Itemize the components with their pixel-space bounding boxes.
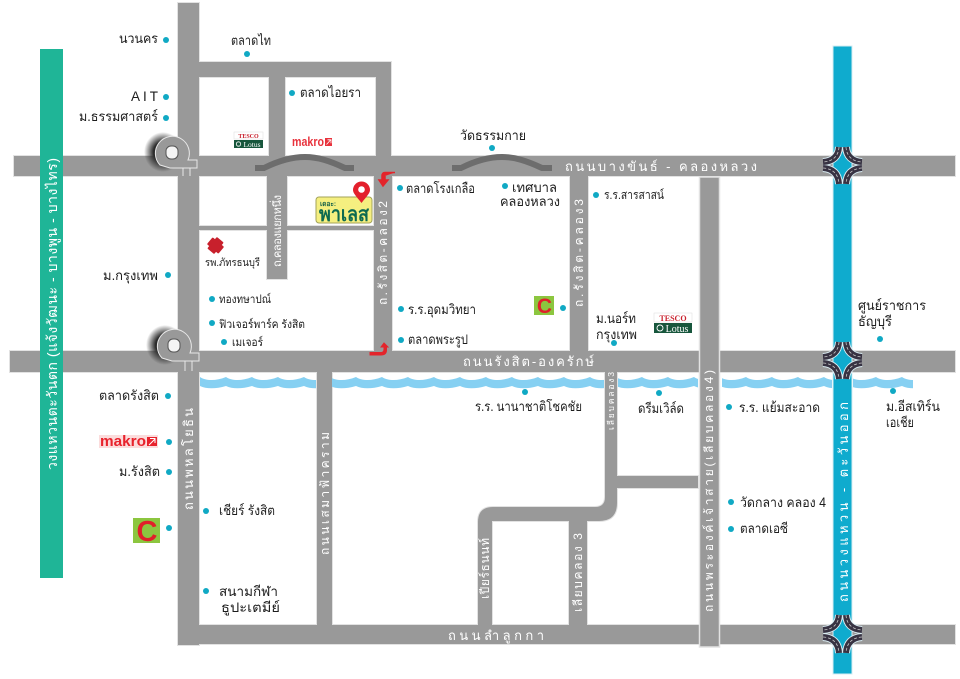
place: Dream World (638, 390, 684, 416)
interchange: Phahonyothin south (146, 325, 199, 371)
place: Thong Thaksa: ทองทษาปณ์ (219, 292, 271, 306)
label: Sema Fah Khram road: ถนนเสมาฟ้าคราม (318, 432, 332, 555)
road: Rangsit Khlong 3 (570, 176, 588, 351)
place: Thanyaburi government center (858, 297, 926, 342)
place: Thong Thaksa (209, 292, 271, 306)
place: Talad Phra Rup (398, 332, 468, 348)
place: Khlong Luang municipality: คลองหลวง (500, 194, 560, 209)
label: Rangsit Ongkharak road: ถนนรังสิต-องครักษ์ (463, 354, 594, 369)
project sign: The Palace (316, 182, 372, 226)
place: North Bangkok University: กรุงเทพ (596, 327, 637, 343)
icon: hospital cross (205, 235, 226, 256)
place: Dream World: ดรีมเวิล์ด (638, 400, 684, 416)
logo: Tesco Lotus north: TESCO (238, 134, 259, 140)
logo: Tesco Lotus north (234, 132, 263, 149)
band: western ring road (40, 49, 63, 578)
road: Lieb Khlong 3 lower (569, 521, 587, 625)
road: Phahonyothin (178, 3, 199, 645)
place: Udom Witthaya school: ร.ร.อุดมวิทยา (408, 302, 476, 318)
interchange: Phahonyothin north (144, 132, 197, 176)
logo: Tesco Lotus east: TESCO (659, 314, 687, 323)
logo: Big C east: C (537, 295, 552, 318)
place: Major (221, 335, 263, 349)
place: Talad Phra Rup: ตลาดพระรูป (408, 332, 468, 348)
place: Cheer Rangsit: เชียร์ รังสิต (219, 502, 275, 518)
place: AIT: AIT (131, 89, 158, 104)
road: Lam Luk Ka (178, 625, 955, 644)
place: Eastern Asia University (886, 388, 940, 430)
place: Thupatemi stadium (203, 584, 280, 616)
label: Rangsit Khlong 2 road: ถ.รังสิต-คลอง2 (376, 201, 390, 305)
logo: Tesco Lotus north: Lotus (243, 140, 261, 149)
place: Talad Aiyara: ตลาดไอยรา (300, 85, 361, 100)
road: Lieb Khlong 3 upper with curve (478, 372, 617, 625)
road: top side road (199, 62, 391, 77)
place: Major: เมเจอร์ (232, 335, 263, 349)
place: Thammasat University: ม.ธรรมศาสตร์ (79, 108, 158, 124)
place: North Bangkok University: ม.นอร์ท (596, 310, 636, 326)
arrow: turn into Khlong 2 road from north (379, 172, 395, 186)
road: Khlong Yaek Nueng (267, 176, 287, 279)
label: Khlong Yaek Nueng road: ถ.คลองแยกหนึ่ง (269, 195, 284, 267)
place: Yaem Sa-at school: ร.ร. แย้มสะอาด (739, 400, 820, 415)
place: Khlong Luang municipality (500, 180, 560, 209)
label: Lam Luk Ka road: ถนนลำลูกกา (448, 628, 544, 644)
place: Khlong Luang municipality: เทศบาล (512, 180, 557, 195)
project sign: The Palace: เดอะ: (320, 201, 336, 208)
label: Piyarom road: เปียร์ธนนท์ (478, 538, 492, 599)
road: branch to Khlong 4 (617, 476, 698, 488)
logo: Tesco Lotus east (654, 313, 692, 335)
label: Lieb Khlong 3 upper: เลียบคลอง3 (606, 372, 616, 430)
place: Chokchai international school: ร.ร. นานาชาติโชคชัย (475, 398, 582, 414)
canal water (200, 376, 913, 389)
place: Talad Thai (231, 33, 271, 57)
label: western ring road: วงแหวนตะวันตก (แจ้งวัฒนะ - บางพูน - บางไทร) (44, 158, 61, 470)
place: Rangsit University: ม.รังสิต (119, 464, 160, 479)
place: Talad Rangsit: ตลาดรังสิต (99, 388, 159, 403)
icon: location pin (353, 182, 370, 203)
place: Thanyaburi government center: ธัญบุรี (858, 314, 892, 330)
place: Wat Klang Khlong 4: วัดกลาง คลอง 4 (740, 495, 826, 510)
interchange: ring road north (823, 147, 862, 184)
place: Thanyaburi government center: ศูนย์ราชการ (858, 297, 926, 314)
logo: Big C west: C (137, 516, 158, 548)
interchange: ring road south (823, 615, 862, 653)
road: Phra Ong Chao Sai (700, 177, 720, 647)
place: Eastern Asia University: เอเชีย (886, 415, 914, 430)
label: Rangsit Khlong 3 road: ถ.รังสิต-คลอง3 (572, 199, 586, 307)
place labels (79, 31, 940, 616)
interchange: ring road middle (823, 342, 862, 379)
place: Cheer Rangsit (203, 502, 275, 518)
label: Phahonyothin road: ถนนพหลโยธิน (181, 408, 196, 510)
place: Eastern Asia University: ม.อีสเทิร์น (886, 398, 940, 414)
logo: Makro west (99, 433, 172, 450)
band: eastern ring road (833, 46, 852, 674)
place: Talad AC: ตลาดเอซี (740, 521, 788, 536)
label: Lieb Khlong 3 lower: เลียบคลอง 3 (571, 533, 585, 612)
place: Wat Thammakai (460, 128, 526, 151)
road: right side road (376, 62, 391, 156)
place: Wat Thammakai: วัดธรรมกาย (460, 128, 526, 143)
place: Thupatemi stadium: สนามกีฬา (219, 584, 278, 599)
road: Sema Fah Khram (317, 372, 332, 625)
place: Chokchai international school (475, 389, 582, 414)
logo: Makro north: makro (292, 134, 324, 149)
place: Phatara Thanaburi hospital: รพ.ภัทรธนบุรี (205, 256, 260, 269)
place: North Bangkok University (596, 310, 637, 346)
road: middle side road (269, 77, 285, 156)
place: Bangkok University: ม.กรุงเทพ (103, 268, 158, 284)
label: Bang Khan road: ถนนบางขันธ์ - คลองหลวง (565, 159, 757, 174)
logo: Big C west (133, 516, 172, 548)
label: Phra Ong Chao Sai road: ถนนพระองค์เจ้าสาย(เลียบคลอง4) (702, 370, 716, 612)
road labels (44, 158, 851, 644)
place: Sarasas school: ร.ร.สารสาสน์ (604, 188, 664, 202)
overpass: near Khlong 1 (255, 157, 354, 168)
logo: Tesco Lotus east: Lotus (666, 324, 688, 335)
label: eastern ring road: ถนนวงแหวน - ตะวันออก (836, 402, 851, 602)
project sign: The Palace: พาเลส (319, 204, 370, 226)
logo: Makro west: makro (100, 433, 146, 450)
place: Thupatemi stadium: ธูปะเตมีย์ (221, 599, 280, 616)
logo: Big C east (534, 295, 566, 318)
road: small connector (199, 226, 374, 230)
place: Talad Rong Kluea: ตลาดโรงเกลือ (406, 180, 475, 196)
road: Rangsit Khlong 2 (374, 176, 392, 351)
place: Talad Thai: ตลาดไท (231, 33, 271, 48)
arrow: turn into Khlong 2 road from south (370, 343, 388, 355)
place: Future Park Rangsit: ฟิวเจอร์พาร์ค รังสิต (219, 317, 305, 331)
road: Rangsit - Ongkharak (10, 351, 955, 372)
road: Bang Khan - Khlong Luang (14, 156, 955, 176)
overpass: near Wat Thammakai (452, 157, 552, 168)
place: Nava Nakorn: นวนคร (119, 31, 158, 46)
